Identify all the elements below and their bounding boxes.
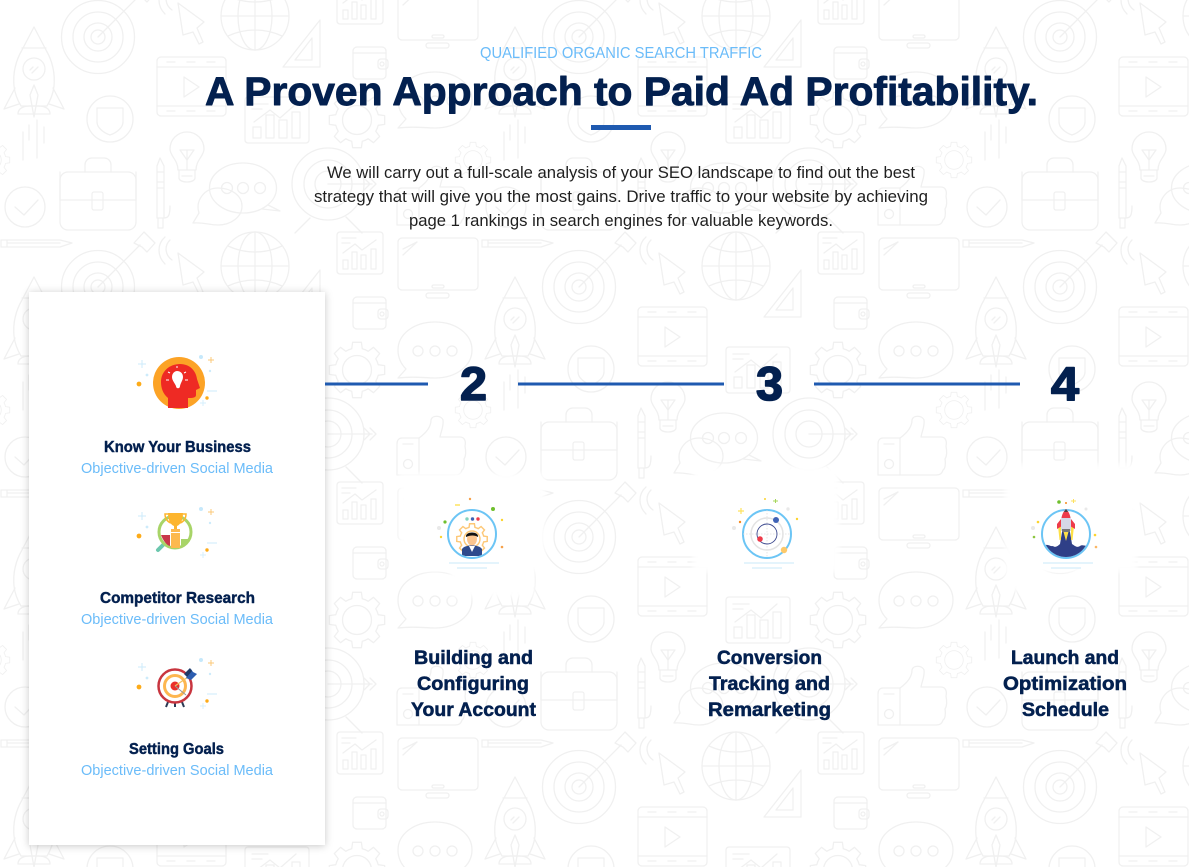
step 2 label: Building and — [414, 647, 533, 669]
connector line 3 to 4 — [814, 382, 1020, 386]
title underline — [591, 125, 651, 130]
step 3 label: Conversion — [717, 647, 822, 669]
step 2 label — [411, 647, 536, 721]
step 1 item: setting goals: Setting Goals — [129, 741, 224, 758]
icon: target and arrow — [137, 658, 217, 709]
step 4 label — [1003, 647, 1127, 721]
step 1 item: competitor research: Competitor Research — [100, 590, 255, 607]
intro paragraph — [314, 164, 928, 230]
step 1 item: know your business: Know Your Business — [104, 439, 251, 456]
step 4 label: Launch and — [1011, 647, 1119, 669]
step 2 label: Configuring — [417, 673, 529, 695]
icon: businessman with gear — [437, 498, 503, 568]
step 1 item: know your business: Objective-driven Social Media — [81, 461, 274, 477]
step 4 label: Schedule — [1022, 699, 1109, 721]
step 3 label: Remarketing — [708, 699, 831, 721]
step 1 item: setting goals: Objective-driven Social Media — [81, 763, 274, 779]
step 1 item: competitor research: Objective-driven Social Media — [81, 612, 274, 628]
step 3 label: Tracking and — [709, 673, 830, 695]
panel: step 1 card — [29, 292, 325, 845]
step 2 label: Your Account — [411, 699, 536, 721]
step number 2: 2 — [460, 357, 487, 410]
intro paragraph: We will carry out a full-scale analysis of your SEO landscape to find out the best — [327, 164, 915, 182]
icon: rocket launch — [1031, 499, 1097, 568]
eyebrow: qualified organic search traffic: QUALIFIED ORGANIC SEARCH TRAFFIC — [480, 45, 762, 62]
step number 3: 3 — [756, 357, 783, 410]
step 3 label — [708, 647, 831, 721]
icon: head with light bulb — [137, 355, 217, 409]
intro paragraph: strategy that will give you the most gains. Drive traffic to your website by achieving — [314, 188, 928, 206]
icon: trophy and magnifier — [137, 507, 217, 558]
step 1 item: know your business — [81, 439, 274, 477]
step number 4: 4 — [1051, 357, 1079, 410]
connector line 2 to 3 — [518, 382, 724, 386]
title: A Proven Approach to Paid Ad Profitability. — [205, 70, 1038, 114]
step 1 item: setting goals — [81, 741, 274, 779]
connector line 1 to 2 — [325, 382, 428, 386]
step 4 label: Optimization — [1003, 673, 1127, 695]
step 1 item: competitor research — [81, 590, 274, 628]
intro paragraph: page 1 rankings in search engines for valuable keywords. — [409, 212, 833, 230]
icon: orbit tracking — [732, 498, 798, 568]
